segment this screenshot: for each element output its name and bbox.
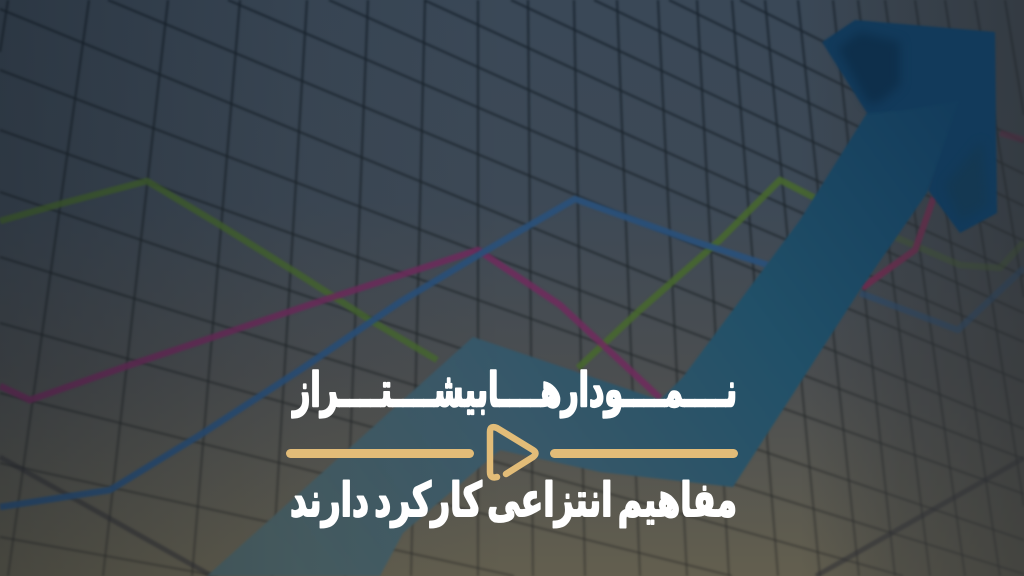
icon: play triangle [490, 427, 536, 477]
heading line 2: مفاهیم انتزاعی کارکرد دارند [290, 473, 737, 528]
arrow head shadow left [838, 32, 900, 104]
arrow head [822, 20, 997, 233]
gold divider left [286, 449, 474, 458]
blue chart line [0, 199, 1024, 507]
arrow head shadow right [945, 140, 988, 222]
green chart line [0, 180, 1024, 368]
right-hand haze [800, 0, 1024, 576]
gold divider right [550, 449, 738, 458]
magenta chart line [0, 133, 1024, 400]
heading line 1: نــــمــــودارهــــابیشــــتــــراز [292, 363, 737, 418]
axis lines [0, 457, 1024, 576]
big blue arrow shaft [207, 60, 990, 576]
